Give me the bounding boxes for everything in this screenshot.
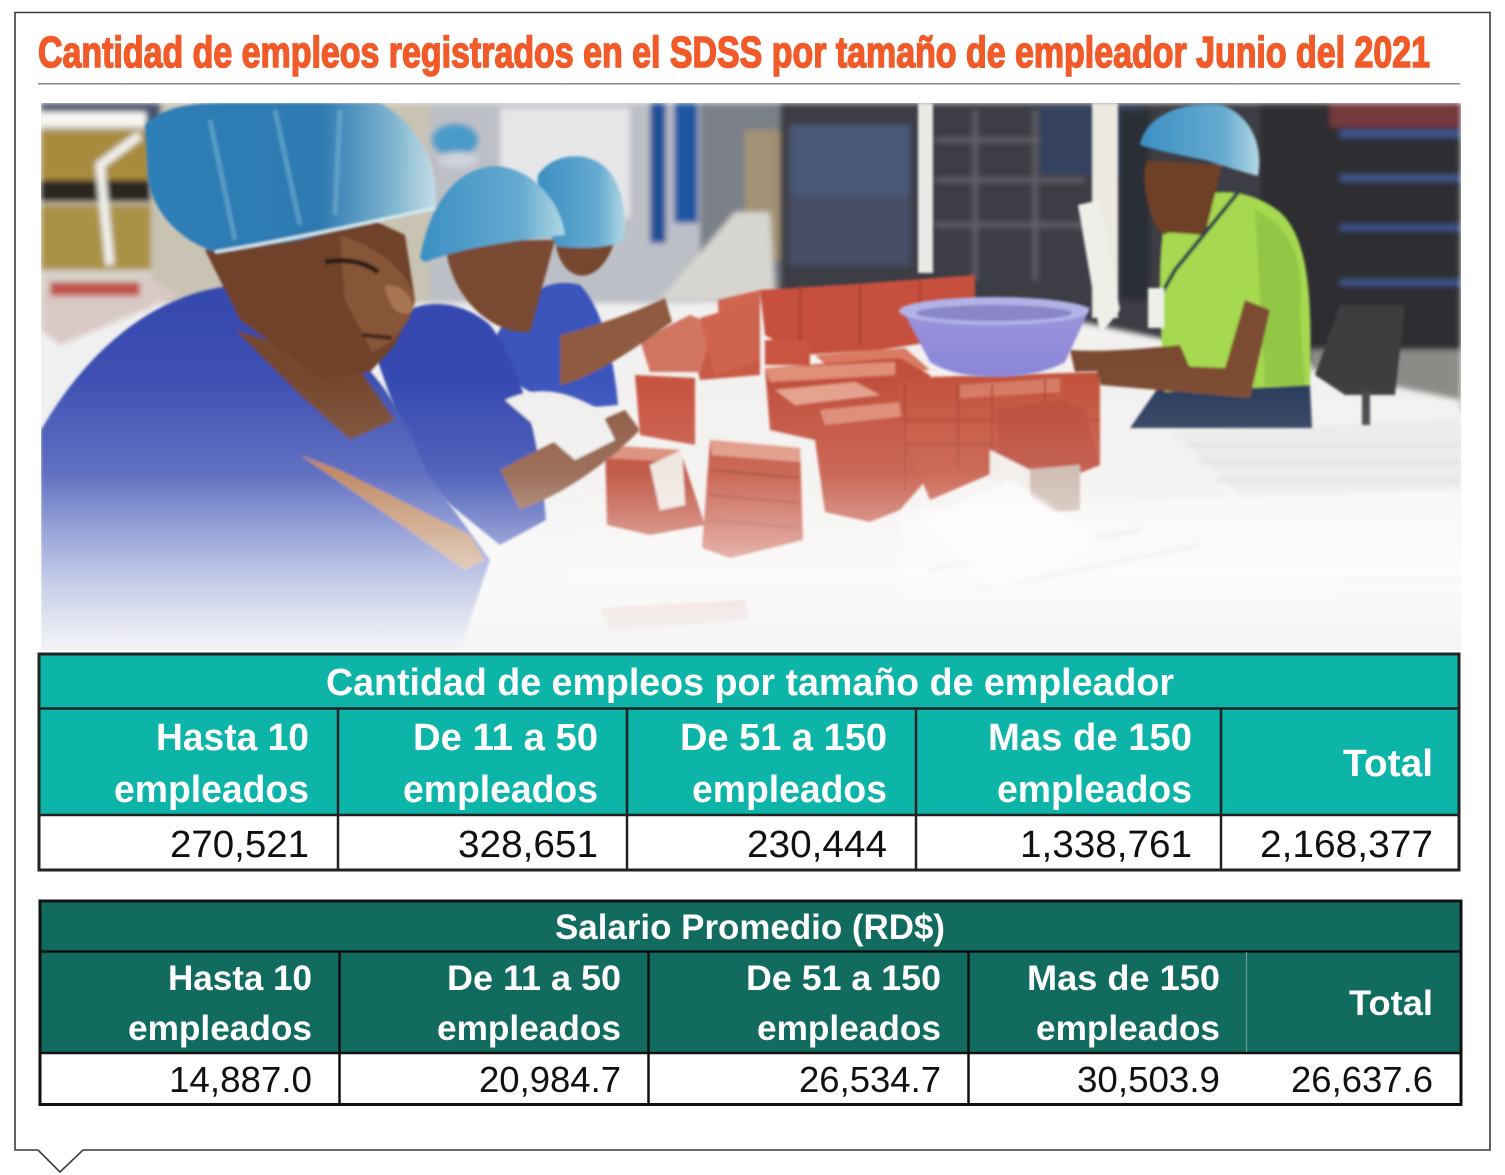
table 2 column: mas de 150: 30,503.9: [1077, 1059, 1220, 1100]
second worker: [372, 166, 640, 545]
table 2 column: de 51 a 150: De 51 a 150: [746, 959, 941, 998]
background: factory hall: [41, 103, 1461, 410]
right worker in green shirt: [1070, 104, 1405, 428]
photo: workers packing red boxes in a factory: [41, 103, 1461, 650]
table 2 column: total: [1291, 984, 1433, 1100]
distant worker: [432, 124, 478, 168]
table 1 column: de 11 a 50: 328,651: [458, 824, 598, 866]
basin: [899, 297, 1090, 377]
table 2 border: [40, 901, 1461, 1104]
table 2 header fill: [40, 901, 1461, 1053]
white packaging papers: [991, 482, 1092, 552]
table 2 column: hasta 10: empleados: [128, 1009, 312, 1048]
table 2 column: mas de 150: Mas de 150: [1027, 959, 1220, 998]
table surface: [902, 318, 1461, 414]
table 2 column: de 11 a 50: 20,984.7: [479, 1059, 621, 1100]
third worker: [490, 156, 672, 410]
red boxes: [600, 275, 1100, 632]
table 1 heading: Cantidad de empleos por tamaño de empleador: [326, 662, 1174, 704]
table 2 grid lines: [40, 951, 1461, 1104]
table 2 column: mas de 150: [1027, 959, 1220, 1100]
white stacks on the table: [1189, 441, 1461, 483]
table 2 column: de 51 a 150: [746, 959, 941, 1100]
table 1 column: de 11 a 50: empleados: [403, 769, 598, 811]
table 1 column: mas de 150: empleados: [997, 769, 1192, 811]
table 1 column: hasta 10: [114, 717, 309, 866]
table 1 column: de 51 a 150: [680, 717, 887, 866]
table 1 column: hasta 10: 270,521: [170, 824, 309, 866]
table 1 column: total: Total: [1343, 743, 1433, 785]
table 1 column: de 51 a 150: De 51 a 150: [680, 717, 887, 759]
table: salario promedio: [40, 901, 1461, 1104]
first worker: [41, 103, 490, 650]
table 1 column: hasta 10: Hasta 10: [156, 717, 309, 759]
table 1 grid lines: [39, 708, 1459, 870]
table 1 column: de 51 a 150: 230,444: [747, 824, 887, 866]
table 1 column: mas de 150: 1,338,761: [1020, 824, 1192, 866]
table 1 column: mas de 150: Mas de 150: [988, 717, 1192, 759]
table 1 column: de 11 a 50: [403, 717, 598, 866]
table 2 column: de 11 a 50: [437, 959, 621, 1100]
table 1 value row fill: [39, 815, 1459, 870]
table 2 column: hasta 10: Hasta 10: [168, 959, 312, 998]
table 2 value row fill: [40, 1053, 1461, 1104]
table 2 column: de 11 a 50: empleados: [437, 1009, 621, 1048]
table 2 column: de 51 a 150: empleados: [757, 1009, 941, 1048]
table 1 column: total: [1260, 743, 1433, 866]
table 2 column: de 51 a 150: 26,534.7: [799, 1059, 941, 1100]
table 1 column: total: 2,168,377: [1260, 824, 1433, 866]
warehouse posts: [918, 103, 1120, 335]
table 2 column: de 11 a 50: De 11 a 50: [447, 959, 621, 998]
table 1 column: hasta 10: empleados: [114, 769, 309, 811]
table 1 border: [39, 654, 1459, 870]
table 1 column: de 11 a 50: De 11 a 50: [413, 717, 598, 759]
table 2 column: mas de 150: empleados: [1036, 1009, 1220, 1048]
table 2 column: hasta 10: [128, 959, 312, 1100]
table: cantidad de empleos: [39, 654, 1459, 870]
table 2 column: hasta 10: 14,887.0: [169, 1059, 312, 1100]
table 2 column: total: Total: [1349, 984, 1433, 1023]
table 1 header fill: [39, 654, 1459, 815]
table 2 heading: Salario Promedio (RD$): [555, 908, 945, 947]
fade of photo into white: [41, 380, 1461, 650]
table 2 column: total: 26,637.6: [1291, 1059, 1433, 1100]
table 1 column: mas de 150: [988, 717, 1192, 866]
table 1 column: de 51 a 150: empleados: [692, 769, 887, 811]
